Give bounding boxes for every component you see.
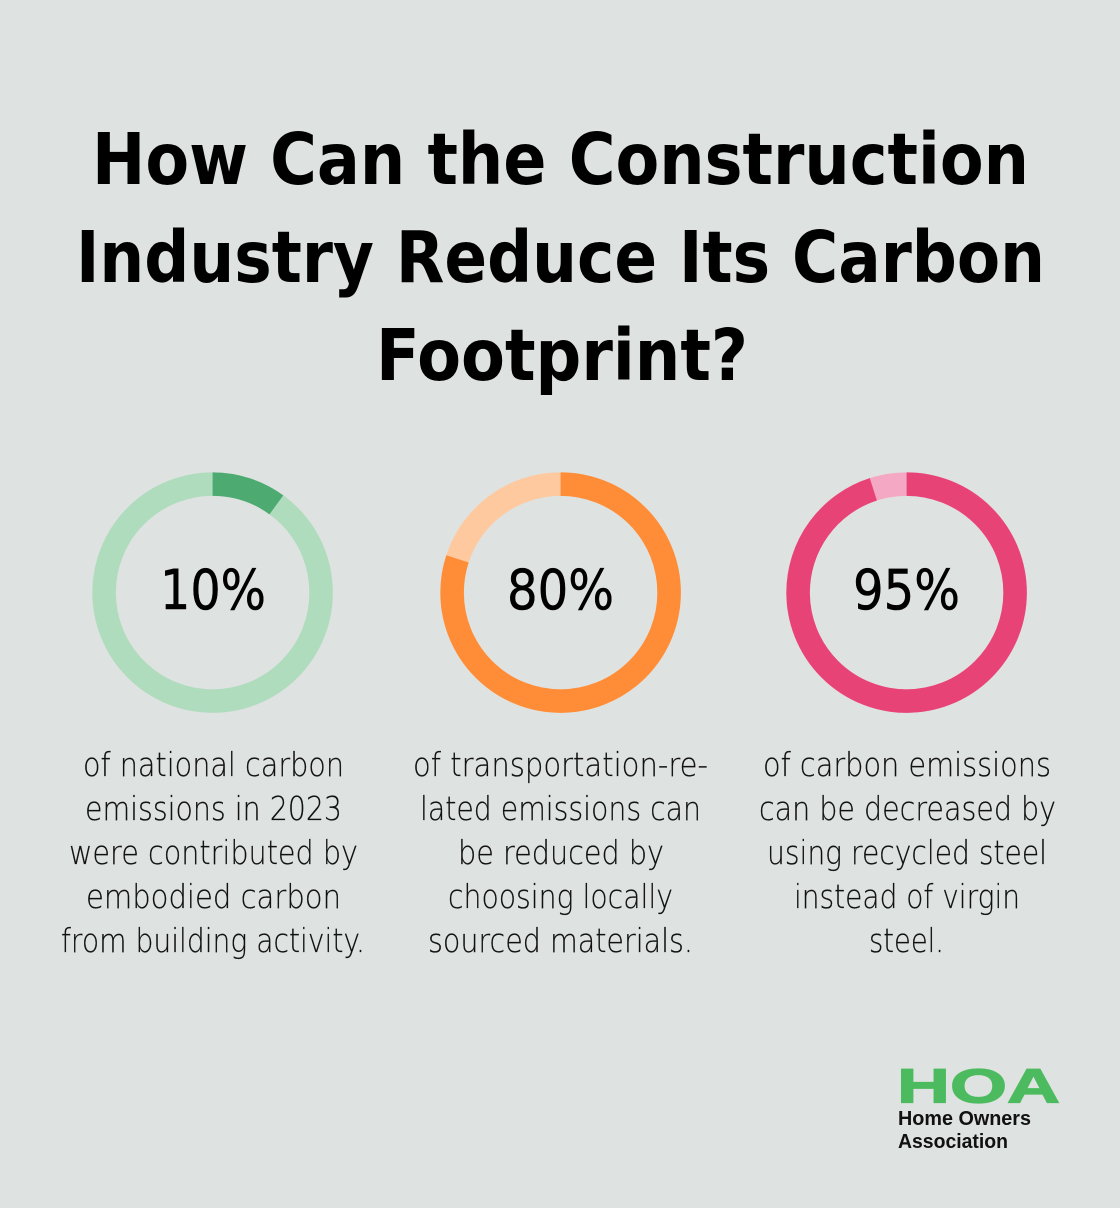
description: 95%: of carbon emissions bbox=[763, 745, 1051, 784]
value: 95%: 95% bbox=[853, 558, 960, 622]
description: 95%: steel. bbox=[869, 921, 944, 960]
description: 80%: sourced materials. bbox=[428, 921, 693, 960]
description: 80%: of transportation-re- bbox=[413, 745, 708, 784]
panel: 95% statistic bbox=[759, 484, 1056, 960]
value: 10%: 10% bbox=[160, 558, 266, 622]
description: 80%: lated emissions can bbox=[420, 789, 701, 828]
description: 80%: be reduced by bbox=[458, 833, 664, 872]
logo: Home Owners Association bbox=[897, 1060, 1060, 1153]
panel: 80% statistic bbox=[413, 484, 708, 960]
title: How Can the Construction bbox=[92, 118, 1029, 201]
panel: 10% statistic bbox=[61, 484, 365, 960]
description: 95% bbox=[759, 745, 1056, 960]
title bbox=[76, 118, 1045, 397]
description: 10%: were contributed by bbox=[69, 833, 358, 872]
value: 80%: 80% bbox=[507, 558, 614, 622]
description: 10%: of national carbon bbox=[83, 745, 344, 784]
donut chart: 10% bbox=[104, 484, 321, 701]
description: 80%: choosing locally bbox=[448, 877, 673, 916]
description: 95%: instead of virgin bbox=[794, 877, 1020, 916]
description: 10%: embodied carbon bbox=[86, 877, 341, 916]
description: 10%: from building activity. bbox=[61, 921, 365, 960]
logo text: Association bbox=[898, 1131, 1008, 1153]
description: 95%: can be decreased by bbox=[759, 789, 1056, 828]
logo text: Home Owners bbox=[898, 1108, 1031, 1130]
description: 10%: emissions in 2023 bbox=[85, 789, 342, 828]
logo text bbox=[898, 1108, 1031, 1153]
title: Footprint? bbox=[376, 314, 748, 397]
logo mark: HOA: HOA bbox=[897, 1060, 1060, 1114]
description: 80% bbox=[413, 745, 708, 960]
description: 10% bbox=[61, 745, 365, 960]
donut chart: 95% bbox=[798, 484, 1015, 701]
description: 95%: using recycled steel bbox=[767, 833, 1047, 872]
donut chart: 80% bbox=[452, 484, 669, 701]
